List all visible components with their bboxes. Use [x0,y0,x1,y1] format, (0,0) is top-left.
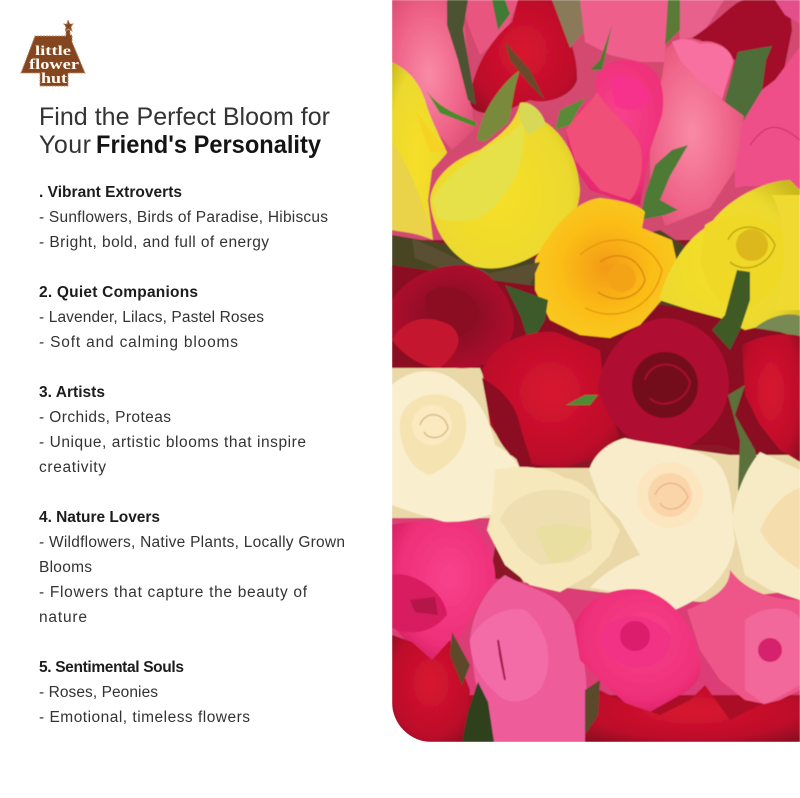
logo wordmark [29,44,79,87]
yellow roses, upper [392,62,800,338]
text block: 4 nature lovers: 4. Nature Lovers [39,509,160,526]
pink roses, top row [392,0,800,226]
text block: 3 artists: creativity [39,459,106,476]
text block: 4 nature lovers: - Flowers that capture the beauty of [39,584,308,601]
text block: 4 nature lovers: Blooms [39,559,92,576]
dark red roses, bottom [392,632,800,742]
photo: rose bouquet [392,0,800,742]
text block: 2 quiet companions: - Lavender, Lilacs, Pastel Roses [39,309,264,326]
text block: 5 sentimental souls [39,659,250,726]
text block: 2 quiet companions [39,284,264,351]
cream roses [392,371,800,612]
text block: 5 sentimental souls: - Roses, Peonies [39,684,158,701]
logo wordmark: flower [29,57,79,73]
text block: 1 vibrant extroverts: - Bright, bold, and full of energy [39,234,269,251]
leaves between yellow and red rows [412,238,800,350]
logo house shape [21,20,85,86]
colour underlays [392,0,800,742]
logo wordmark: hut [41,71,67,87]
text block: 5 sentimental souls: - Emotional, timeless flowers [39,709,250,726]
text block: 2 quiet companions: - Soft and calming blooms [39,334,238,351]
text block: 4 nature lovers: - Wildflowers, Native Plants, Locally Grown [39,534,345,551]
title: Friend's Personality [96,131,321,159]
text block: 3 artists [39,384,306,476]
text block: 1 vibrant extroverts: . Vibrant Extroverts [39,184,182,201]
text block: 1 vibrant extroverts: - Sunflowers, Birds of Paradise, Hibiscus [39,209,328,226]
title [39,103,330,159]
logo: little flower hut [21,20,85,87]
title: Find the Perfect Bloom for [39,103,330,131]
text block: 2 quiet companions: 2. Quiet Companions [39,284,198,301]
text block: 3 artists: - Orchids, Proteas [39,409,171,426]
logo wordmark: little [35,44,71,59]
text block: 1 vibrant extroverts [39,184,328,251]
text block: 5 sentimental souls: 5. Sentimental Souls [39,659,184,676]
text block: 3 artists: - Unique, artistic blooms that inspire [39,434,306,451]
text block: 3 artists: 3. Artists [39,384,105,401]
title: Your [39,131,91,159]
text block: 4 nature lovers: nature [39,609,87,626]
pink roses, bottom row [392,522,800,742]
green leaves, upper [426,0,680,142]
red roses, middle [392,265,800,517]
text block: 4 nature lovers [39,509,345,626]
